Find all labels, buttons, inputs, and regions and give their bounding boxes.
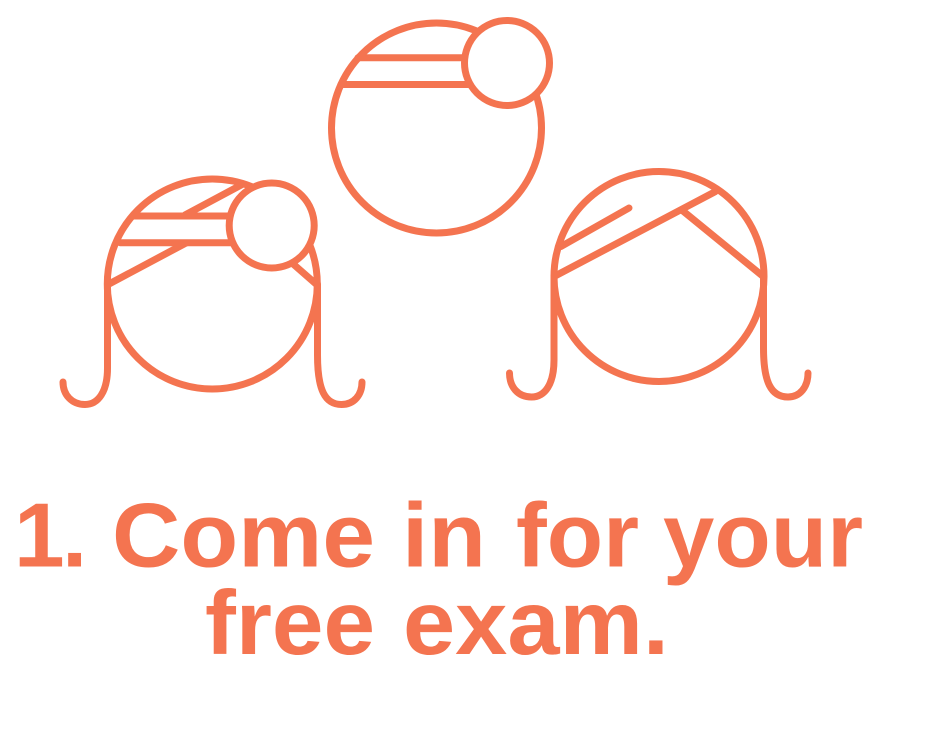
- heading line 2: free: [205, 573, 375, 674]
- heading line 2: [205, 573, 669, 674]
- icon: left head with bun and hair: [63, 179, 362, 404]
- heading line 2: exam.: [403, 573, 669, 674]
- heading line 1: Come: [112, 486, 375, 586]
- icon: top head with bun: [332, 20, 550, 233]
- heading line 1: 1.: [14, 486, 87, 586]
- heading: [14, 486, 863, 674]
- icon: right head with hair: [510, 172, 808, 397]
- heading line 1: your: [663, 486, 863, 586]
- heading line 1: in: [402, 486, 486, 586]
- heading line 1: for: [516, 486, 639, 586]
- heading line 1: [14, 486, 863, 586]
